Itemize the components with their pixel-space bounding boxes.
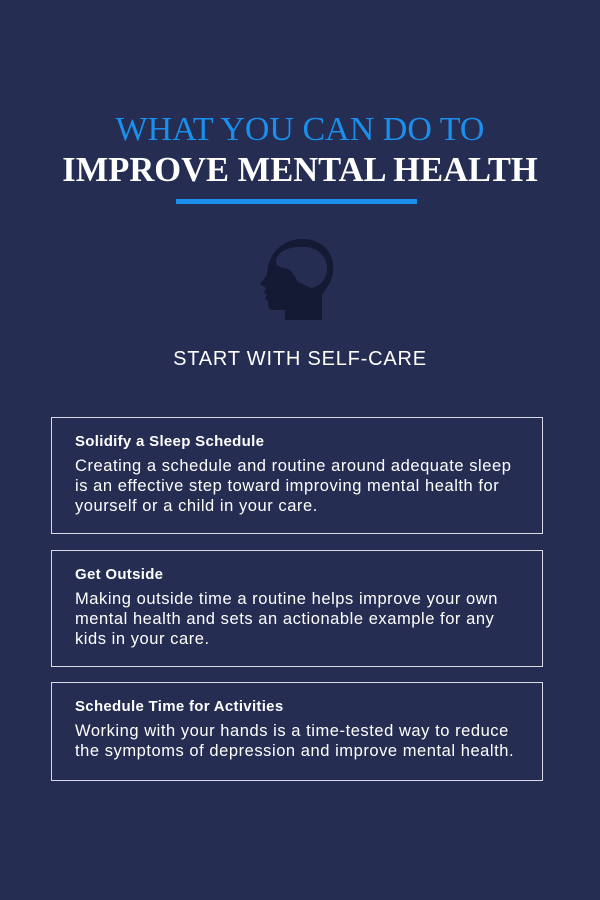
subtitle: START WITH SELF-CARE <box>173 348 427 370</box>
panel: sleep: Creating a schedule and routine around adequate sleep is an effective step toward improving mental health for yourself or a child in your care. <box>75 457 511 515</box>
panel: sleep <box>51 417 543 534</box>
panel: outside: Making outside time a routine helps improve your own mental health and sets an actionable example for any kids in your care. <box>75 590 498 648</box>
panel: outside: Get Outside <box>75 566 163 583</box>
panel: activities <box>51 682 543 781</box>
panel: outside <box>51 550 543 667</box>
title line 2: IMPROVE MENTAL HEALTH <box>62 151 538 189</box>
icon: head with brain <box>260 239 334 320</box>
title underline <box>176 199 417 204</box>
title line 1: WHAT YOU CAN DO TO <box>116 111 484 148</box>
panel: activities: Schedule Time for Activities <box>75 698 283 715</box>
panel: activities: Working with your hands is a time-tested way to reduce the symptoms of depression and improve mental health. <box>75 722 514 760</box>
panel: sleep: Solidify a Sleep Schedule <box>75 433 264 450</box>
